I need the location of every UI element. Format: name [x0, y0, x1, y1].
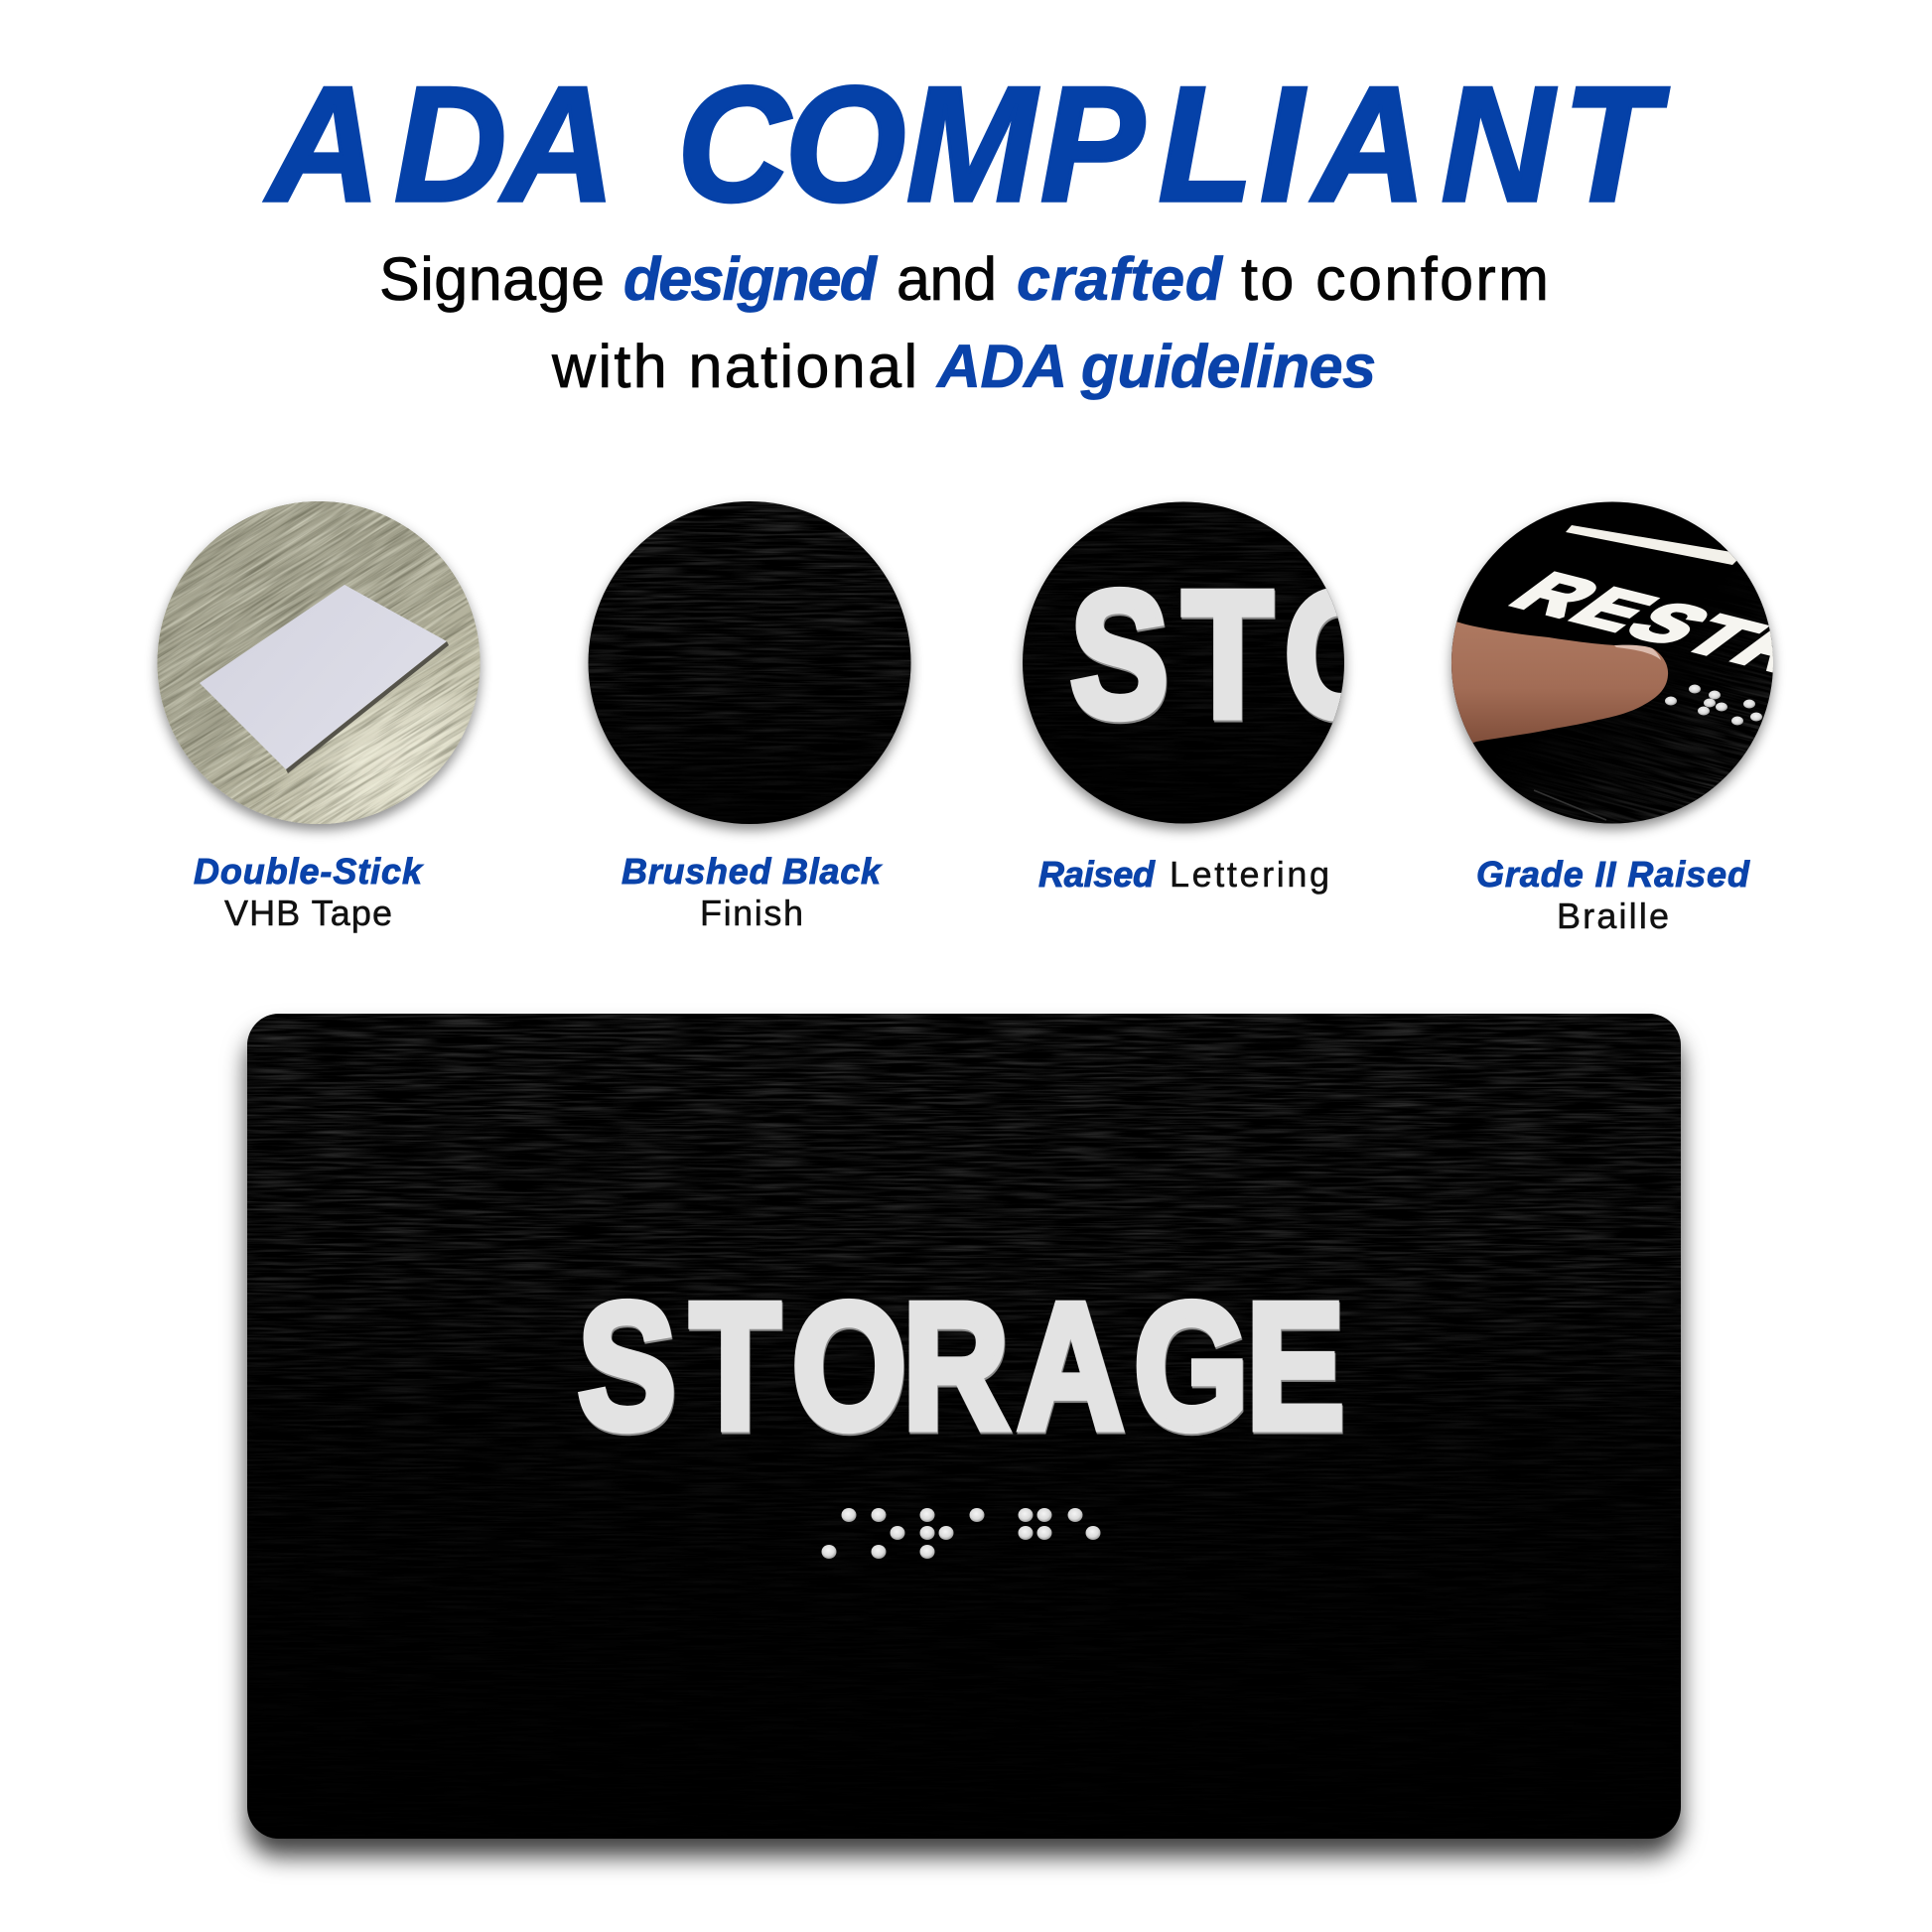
caption: Grade II Raised: [1476, 854, 1750, 895]
caption: Double-Stick: [194, 851, 424, 892]
caption: Brushed Black: [621, 851, 883, 892]
subtitle: and: [897, 245, 997, 313]
caption: Finish: [700, 893, 803, 933]
subtitle: Signage: [379, 245, 605, 313]
subtitle: with national: [551, 333, 917, 400]
icon: finger reading braille circle: [1444, 499, 1781, 838]
subtitle: designed: [623, 245, 879, 313]
caption: Braille: [1557, 896, 1669, 936]
icon: finger reading braille circle: RESTR: [1494, 562, 1844, 684]
subtitle: ADA guidelines: [935, 333, 1376, 400]
sign plate: [247, 1013, 1681, 1839]
raised lettering: STORAGE: [578, 1266, 1344, 1465]
feature: brushed black finish: [586, 498, 913, 933]
main sign: STORAGE: [247, 1013, 1681, 1839]
feature: grade II raised braille: [1444, 499, 1781, 929]
finger: [1451, 621, 1668, 743]
icon: tape on brushed metal circle: [149, 498, 488, 838]
caption: [621, 851, 883, 933]
subtitle: [379, 245, 1549, 400]
icon: raised letters circle: STO: [1070, 554, 1399, 754]
feature: double-stick VHB tape: [149, 498, 488, 933]
subtitle: to conform: [1241, 245, 1549, 313]
title: ADA COMPLIANT: [264, 53, 1669, 236]
icon: raised letters circle: [1021, 499, 1399, 827]
braille dots: [1665, 685, 1762, 725]
subtitle: crafted: [1017, 245, 1224, 313]
feature: raised lettering: [1015, 499, 1352, 895]
caption: [1476, 854, 1750, 936]
caption: Lettering: [1170, 854, 1329, 895]
caption: VHB Tape: [224, 893, 392, 933]
braille: [822, 1508, 1100, 1559]
icon: brushed black circle: [586, 498, 913, 826]
caption: [1038, 854, 1329, 895]
caption: Raised: [1038, 854, 1156, 895]
caption: [194, 851, 424, 933]
